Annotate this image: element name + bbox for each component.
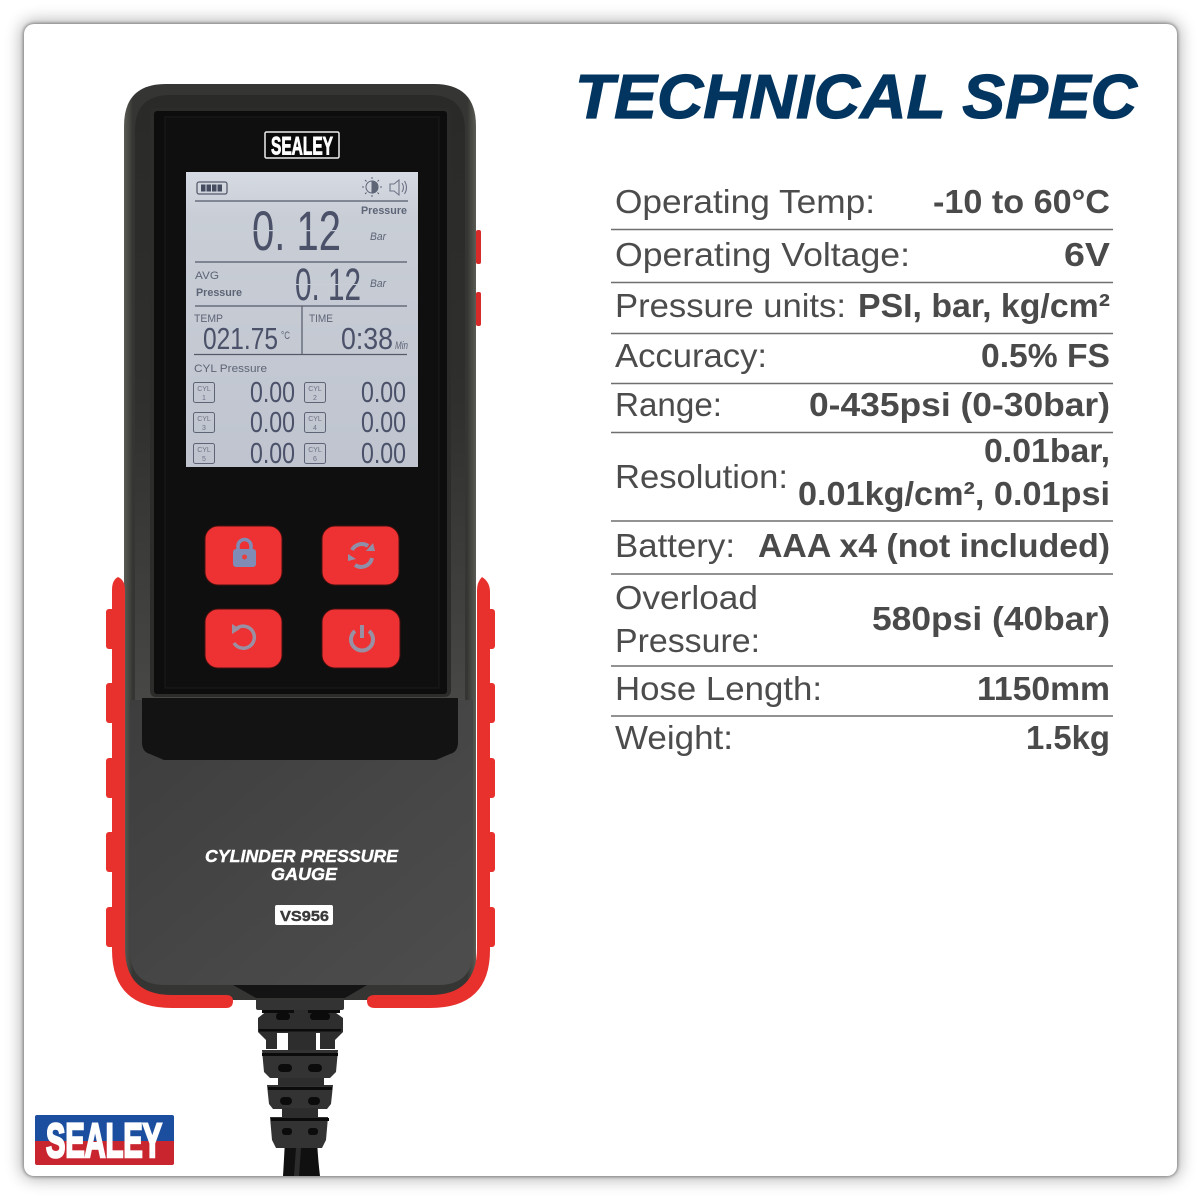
row: operating temp: Operating Temp: [615, 183, 875, 220]
cylinder 2: 0.00 [361, 377, 406, 409]
row: operating temp [615, 183, 1110, 220]
time reading: TIME [309, 313, 333, 325]
main pressure reading: Pressure [361, 205, 407, 217]
row: resolution: Resolution: [615, 458, 788, 495]
model badge [275, 905, 333, 925]
average pressure reading: 0. 12 [295, 259, 361, 310]
row: hose length: 1150mm [977, 670, 1110, 707]
cylinder 3: 3 [202, 425, 206, 432]
product name: CYLINDER PRESSURE [205, 846, 399, 866]
black screen bezel [154, 111, 447, 694]
row: battery: AAA x4 (not included) [758, 527, 1110, 564]
top step moulding [135, 95, 465, 705]
bottom connector shadow [233, 985, 367, 998]
cylinder 2: 2 [313, 395, 317, 402]
row: overload pressure: Pressure: [615, 622, 760, 659]
cylinder 5: CYL [197, 447, 211, 454]
row: range: Range: [615, 386, 722, 423]
right rubber bumper [367, 577, 495, 1008]
row: resolution [615, 432, 1110, 512]
row: overload pressure [615, 579, 1110, 659]
temperature reading [194, 313, 290, 356]
main pressure reading: 0. 12 [252, 199, 341, 262]
time reading: Min [395, 340, 408, 352]
icon: speaker [390, 180, 406, 195]
row: hose length [615, 670, 1110, 707]
cylinder 6 [304, 438, 406, 470]
button: lock [205, 526, 282, 585]
title: TECHNICAL SPEC [575, 63, 1138, 132]
cylinder 4: 4 [313, 425, 317, 432]
row: resolution: 0.01bar, [984, 432, 1110, 469]
row: resolution: 0.01kg/cm², 0.01psi [798, 475, 1110, 512]
row: operating voltage: Operating Voltage: [615, 236, 910, 273]
time reading [309, 313, 408, 356]
row: accuracy: Accuracy: [615, 337, 767, 374]
cylinder 5: 5 [202, 456, 206, 463]
row: hose length: Hose Length: [615, 670, 822, 707]
button: undo [205, 609, 282, 668]
row: operating voltage [615, 236, 1110, 273]
brand badge [265, 132, 339, 160]
row: battery [615, 527, 1110, 564]
front fascia rim [150, 108, 451, 697]
cylinder 3 [194, 407, 295, 439]
black lower wedge [142, 698, 458, 760]
row: weight [615, 719, 1110, 756]
row: pressure units: PSI, bar, kg/cm² [858, 287, 1110, 324]
row: pressure units [615, 287, 1110, 324]
row: battery: Battery: [615, 527, 735, 564]
model badge: VS956 [280, 908, 329, 925]
brand badge: SEALEY [271, 132, 333, 160]
temperature reading: TEMP [194, 313, 223, 325]
main pressure reading: Bar [370, 231, 387, 243]
spec table [611, 183, 1113, 756]
temperature reading: 021.75 [203, 321, 278, 356]
button: refresh [322, 526, 399, 585]
cylinder 1: 1 [202, 395, 206, 402]
lower panel [130, 700, 473, 985]
temperature reading: °C [281, 330, 290, 342]
cylinder 4: CYL [308, 416, 322, 423]
cylinder 4 [304, 407, 406, 439]
cylinder 1: 0.00 [250, 377, 295, 409]
left rubber bumper [106, 577, 233, 1008]
row: weight: 1.5kg [1026, 719, 1110, 756]
row: weight: Weight: [615, 719, 733, 756]
device body [124, 84, 476, 1000]
LCD screen [186, 172, 418, 470]
cylinder 6: 0.00 [361, 438, 406, 470]
row: accuracy [615, 337, 1110, 374]
SEALEY logo: SEALEY [46, 1115, 162, 1168]
cylinder 5 [194, 438, 295, 470]
product name [205, 846, 399, 884]
button: power [322, 609, 400, 668]
average pressure reading: Pressure [196, 287, 242, 299]
SEALEY logo [35, 1115, 174, 1168]
row: pressure units: Pressure units: [615, 287, 846, 324]
average pressure reading: Bar [370, 278, 387, 290]
cylinder 1 [194, 377, 295, 409]
side buttons [476, 230, 481, 326]
cylinder 3: 0.00 [250, 407, 295, 439]
cylinder 6: 6 [313, 456, 317, 463]
row: accuracy: 0.5% FS [981, 337, 1110, 374]
cylinder 5: 0.00 [250, 438, 295, 470]
row: operating voltage: 6V [1064, 236, 1110, 273]
row: range [615, 386, 1110, 423]
time reading: 0:38 [341, 321, 393, 356]
cylinder pressure heading: CYL Pressure [194, 363, 267, 375]
icon: brightness [362, 177, 382, 197]
row: overload pressure: Overload [615, 579, 758, 616]
product name: GAUGE [271, 864, 338, 884]
icon: battery [197, 182, 227, 194]
cable and strain relief boot [256, 997, 344, 1176]
average pressure reading: AVG [195, 270, 219, 282]
cylinder 2 [304, 377, 406, 409]
average pressure reading [195, 259, 387, 310]
row: operating temp: -10 to 60°C [933, 183, 1110, 220]
cylinder 3: CYL [197, 416, 211, 423]
cylinder 2: CYL [308, 386, 322, 393]
row: range: 0-435psi (0-30bar) [809, 386, 1110, 423]
cylinder 6: CYL [308, 447, 322, 454]
row: overload pressure: 580psi (40bar) [872, 600, 1110, 637]
cylinder 1: CYL [197, 386, 211, 393]
cylinder 4: 0.00 [361, 407, 406, 439]
